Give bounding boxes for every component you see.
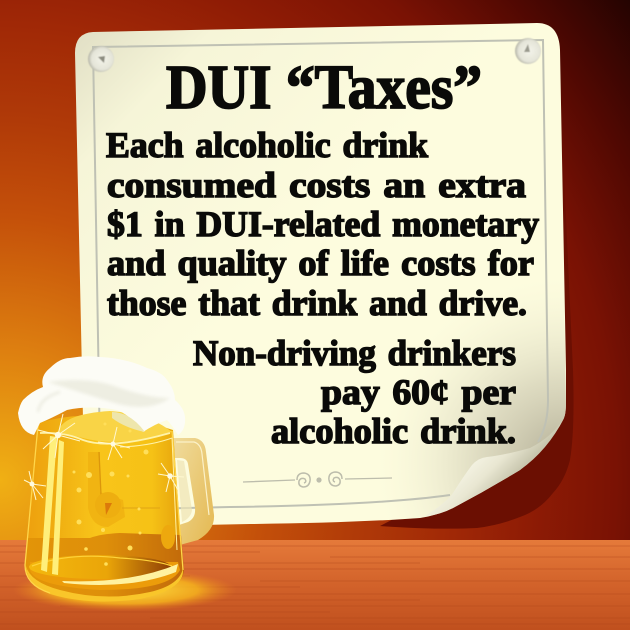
- paper shadow: [380, 40, 574, 529]
- title: DUI “Taxes”: [166, 54, 482, 122]
- pin: top left: [88, 46, 114, 72]
- text block: non-driving drinkers: alcoholic drink.: [271, 411, 516, 451]
- text block: drivers cost: and quality of life costs for: [107, 243, 534, 283]
- table glow: [13, 569, 237, 611]
- inner light stripes: [41, 436, 64, 575]
- text block: non-driving drinkers: pay 60¢ per: [321, 372, 516, 412]
- mug knob: [161, 525, 175, 549]
- glass base inner: [29, 555, 171, 579]
- paper note: [75, 23, 566, 527]
- bubbles: [72, 422, 148, 566]
- beer mug: [13, 356, 237, 611]
- glass body with beer: [25, 415, 183, 600]
- pin: top right: [515, 38, 541, 64]
- text block: drivers cost: Each alcoholic drink: [106, 125, 428, 165]
- text block: drivers cost: [106, 125, 539, 323]
- beer below table line: [25, 533, 184, 600]
- reflection shape: [88, 452, 160, 527]
- wooden table: [0, 540, 630, 630]
- ornament: [243, 472, 392, 487]
- folded page corner: [425, 418, 564, 516]
- text block: drivers cost: $1 in DUI-related monetary: [107, 204, 539, 244]
- text block: non-driving drinkers: Non-driving drinkers: [193, 333, 516, 373]
- sparkles: [24, 414, 184, 500]
- beer foam: [18, 356, 185, 435]
- mug handle: [172, 438, 214, 546]
- inner border line: [93, 40, 548, 510]
- text block: drivers cost: consumed costs an extra: [107, 165, 526, 205]
- text block: drivers cost: those that drink and drive.: [107, 283, 527, 323]
- text block: non-driving drinkers: [193, 333, 516, 451]
- glass base outer: [26, 566, 183, 602]
- beer surface line: [40, 433, 170, 444]
- beer surface top: [58, 411, 172, 442]
- glass outline: [25, 425, 183, 593]
- paper sheet: [75, 23, 566, 527]
